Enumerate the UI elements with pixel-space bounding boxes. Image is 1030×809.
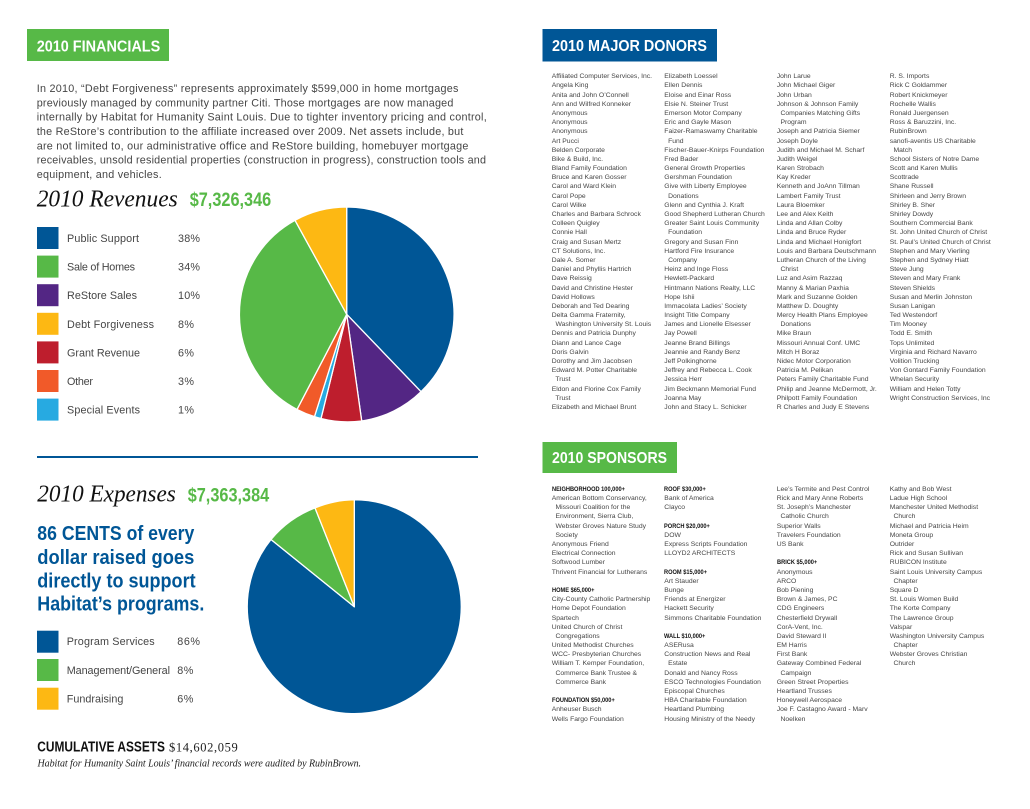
sponsor list: column 2: ROOF $30,000+ bbox=[664, 486, 706, 493]
heading: 2010 expenses bbox=[37, 481, 270, 508]
legend: revenues: 38% bbox=[178, 233, 200, 245]
legend: revenues: Debt Forgiveness bbox=[67, 319, 155, 331]
legend: revenues: Sale of Homes bbox=[67, 262, 136, 274]
legend: revenues: Public Support bbox=[67, 233, 139, 245]
callout: 86 cents: 86 CENTS of every bbox=[37, 523, 195, 545]
sponsor list: column 3: BRICK $5,000+ bbox=[777, 559, 817, 566]
sponsor list: column 2: PORCH $20,000+ bbox=[664, 523, 710, 530]
legend: expenses: Management/General bbox=[67, 665, 170, 677]
legend: revenues: Other bbox=[67, 376, 93, 388]
legend: revenues bbox=[37, 227, 200, 421]
text block: financial summary: internally by Habitat for Humanity Saint Louis. Due to tighter inventory pricing and control, bbox=[37, 112, 487, 124]
legend: expenses: 6% bbox=[177, 694, 194, 706]
heading: 2010 sponsors: 2010 SPONSORS bbox=[552, 450, 667, 467]
donor list: column 2: Elizabeth Loessel Ellen Dennis Eloise and Einar Ross Elsie N. Steiner Trust Emerson Motor Company Eric and Gayle Mason Faizer-Ramaswamy Charitable Fund Fischer-Bauer-Knirps Foundation Fred Bader General Growth Properties Gershman Foundation Give with Liberty Employee Donations Glenn and Cynthia J. Kraft Good Shepherd Lutheran Church Greater Saint Louis Community Foundation Gregory and Susan Finn Hartford Fire Insurance Company Heinz and Inge Floss Hewlett-Packard Hintmann Nations Realty, LLC Hope Ishii Immacolata Ladies’ Society Insight Title Company James and Lionelle Elsesser Jay Powell Jeanne Brand Billings Jeannie and Randy Benz Jeff Polkinghorne Jeffrey and Rebecca L. Cook Jessica Herr Jim Beckmann Memorial Fund Joanna May John and Stacy L. Schicker bbox=[664, 73, 765, 411]
legend: revenues: ReStore Sales bbox=[67, 290, 138, 302]
text block: financial summary: In 2010, “Debt Forgiveness” represents approximately $599,000 in home mortgages bbox=[37, 83, 459, 95]
legend: expenses: Fundraising bbox=[67, 694, 123, 706]
legend: revenues: 34% bbox=[178, 262, 200, 274]
sponsor list: column 2: WALL $10,000+ bbox=[664, 633, 706, 640]
legend: revenues: 8% bbox=[178, 319, 194, 331]
donor list: column 4: R. S. Imports Rick C Goldammer Robert Knickmeyer Rochelle Wallis Ronald Juergensen Ross & Baruzzini, Inc. RubinBrown sanofi-aventis US Charitable Match School Sisters of Notre Dame Scott and Karen Mullis Scottrade Shane Russell Shirleen and Jerry Brown Shirley B. Sher Shirley Dowdy Southern Commercial Bank St. John United Church of Christ St. Paul’s United Church of Christ Stephen and Mary Vierling Stephen and Sydney Hiatt Steve Jung Steven and Mary Frank Steven Shields Susan and Merlin Johnston Susan Lanigan Ted Westendorf Tim Mooney Todd E. Smith Tops Unlimited Virginia and Richard Navarro Volition Trucking Von Gontard Family Foundation Whelan Security William and Helen Totty Wright Construction Services, Inc bbox=[890, 73, 991, 402]
text block: financial summary: are not limited to, our administrative office and ReStore building, homebuyer mortgage bbox=[37, 140, 468, 152]
pie chart: expenses bbox=[247, 500, 461, 714]
text block: financial summary: receivables, unsold residential properties (construction in progress), construction tools and bbox=[37, 155, 486, 167]
heading: 2010 financials bbox=[27, 29, 169, 61]
heading: 2010 major donors bbox=[542, 29, 717, 62]
heading: 2010 revenues bbox=[37, 186, 271, 212]
legend: revenues: Grant Revenue bbox=[67, 347, 140, 359]
text block: financial summary: equipment, and vehicles. bbox=[37, 169, 162, 181]
divider bbox=[37, 456, 478, 458]
heading: 2010 major donors: 2010 MAJOR DONORS bbox=[552, 38, 707, 55]
sponsor list: column 2: Bank of America Clayco DOW Express Scripts Foundation LLOYD2 ARCHITECTS Art Stauder Bunge Friends at Energizer Hackett Security Simmons Charitable Foundation ASERusa Construction News and Real Estate Donald and Nancy Ross ESCO Technologies Foundation Episcopal Churches HBA Charitable Foundation Heartland Plumbing Housing Ministry of the Needy bbox=[664, 495, 761, 723]
heading: 2010 sponsors bbox=[542, 442, 677, 473]
legend: revenues: 3% bbox=[178, 376, 194, 388]
cumulative assets: $14,602,059 bbox=[169, 741, 238, 755]
legend: expenses bbox=[37, 631, 200, 710]
sponsor list: column 1: FOUNDATION $50,000+ bbox=[552, 697, 614, 704]
callout: 86 cents: Habitat’s programs. bbox=[37, 594, 204, 616]
pie chart: revenues bbox=[239, 207, 454, 422]
heading: 2010 expenses: $7,363,384 bbox=[188, 486, 270, 507]
legend: expenses: Program Services bbox=[67, 636, 155, 648]
heading: 2010 financials: 2010 FINANCIALS bbox=[37, 39, 160, 56]
legend: revenues: 10% bbox=[178, 290, 200, 302]
legend: expenses: 8% bbox=[177, 665, 194, 677]
callout: 86 cents: dollar raised goes bbox=[37, 547, 194, 569]
legend: revenues: 6% bbox=[178, 347, 194, 359]
sponsor list: column 3: Lee’s Termite and Pest Control Rick and Mary Anne Roberts St. Joseph’s Manchester Catholic Church Superior Walls Travelers Foundation US Bank Anonymous ARCO Bob Piening Brown & James, PC CDG Engineers Chesterfield Drywall CorA-Vent, Inc. David Steward II EM Harris First Bank Gateway Combined Federal Campaign Green Street Properties Heartland Trusses Honeywell Aerospace Joe F. Castagno Award - Marv Noelken bbox=[777, 486, 869, 723]
text block: financial summary bbox=[37, 83, 487, 181]
sponsor list: column 2: ROOM $15,000+ bbox=[664, 569, 707, 576]
donor list: column 1: Affiliated Computer Services, Inc. Angela King Anita and John O’Connell Ann and Wilfred Konneker Anonymous Anonymous Anonymous Art Pucci Belden Corporate Bike & Build, Inc. Bland Family Foundation Bruce and Karen Gosser Carol and Ward Klein Carol Pope Carol Wilke Charles and Barbara Schrock Colleen Quigley Connie Hall Craig and Susan Mertz CT Solutions, Inc. Dale A. Somer Daniel and Phyllis Hartrich Dave Reissig David and Christine Hester David Hollows Deborah and Ted Dearing Delta Gamma Fraternity, Washington University St. Louis Dennis and Patricia Dunphy Diann and Lance Cage Doris Galvin Dorothy and Jim Jacobsen Edward M. Potter Charitable Trust Eldon and Florine Cox Family Trust Elizabeth and Michael Brunt bbox=[552, 73, 652, 411]
cumulative assets: CUMULATIVE ASSETS bbox=[37, 740, 165, 756]
heading: 2010 revenues: 2010 Revenues bbox=[37, 186, 178, 212]
sponsor list: column 1: HOME $65,000+ bbox=[552, 587, 594, 594]
heading: 2010 revenues: $7,326,346 bbox=[190, 190, 271, 211]
callout: 86 cents: directly to support bbox=[37, 570, 196, 592]
heading: 2010 expenses: 2010 Expenses bbox=[37, 481, 176, 508]
sponsor list: column 1: NEIGHBORHOOD 100,000+ bbox=[552, 486, 625, 493]
sponsor list: column 4: Kathy and Bob West Ladue High School Manchester United Methodist Church Michael and Patricia Heim Moneta Group Outrider Rick and Susan Sullivan RUBICON Institute Saint Louis University Campus Chapter Square D St. Louis Women Build The Korte Company The Lawrence Group Valspar Washington University Campus Chapter Webster Groves Christian Church bbox=[890, 486, 984, 667]
text block: financial summary: previously managed by community partner Citi. Those mortgages are now managed bbox=[37, 97, 453, 109]
legend: revenues: Special Events bbox=[67, 405, 141, 417]
legend: revenues: 1% bbox=[178, 405, 194, 417]
legend: expenses: 86% bbox=[177, 636, 200, 648]
audit note: Habitat for Humanity Saint Louis’ financial records were audited by RubinBrown. bbox=[36, 759, 361, 770]
donor list: column 3: John Larue John Michael Giger John Urban Johnson & Johnson Family Companies Matching Gifts Program Joseph and Patricia Siemer Joseph Doyle Judith and Michael M. Scharf Judith Weigel Karen Strobach Kay Kreder Kenneth and JoAnn Tillman Lambert Family Trust Laura Bloemker Lee and Alex Keith Linda and Allan Colby Linda and Bruce Ryder Linda and Michael Honigfort Louis and Barbara Deutschmann Lutheran Church of the Living Christ Luz and Asim Razzaq Manny & Marian Paxhia Mark and Suzanne Golden Matthew D. Doughty Mercy Health Plans Employee Donations Mike Braun Missouri Annual Conf. UMC Mitch H Boraz Nidec Motor Corporation Patricia M. Pelikan Peters Family Charitable Fund Philip and Jeanne McDermott, Jr. Philpott Family Foundation R Charles and Judy E Stevens bbox=[777, 73, 877, 411]
text block: financial summary: the ReStore’s contribution to the affiliate increased over 2009. Net assets include, but bbox=[37, 126, 463, 138]
callout: 86 cents bbox=[37, 523, 204, 616]
sponsor list: column 1: American Bottom Conservancy, Missouri Coalition for the Environment, Sierra Club, Webster Groves Nature Study Society Anonymous Friend Electrical Connection Softwood Lumber Thrivent Financial for Lutherans City-County Catholic Partnership Home Depot Foundation Spartech United Church of Christ Congregations United Methodist Churches WCC- Presbyterian Churches William T. Kemper Foundation, Commerce Bank Trustee & Commerce Bank Anheuser Busch Wells Fargo Foundation bbox=[552, 495, 650, 723]
